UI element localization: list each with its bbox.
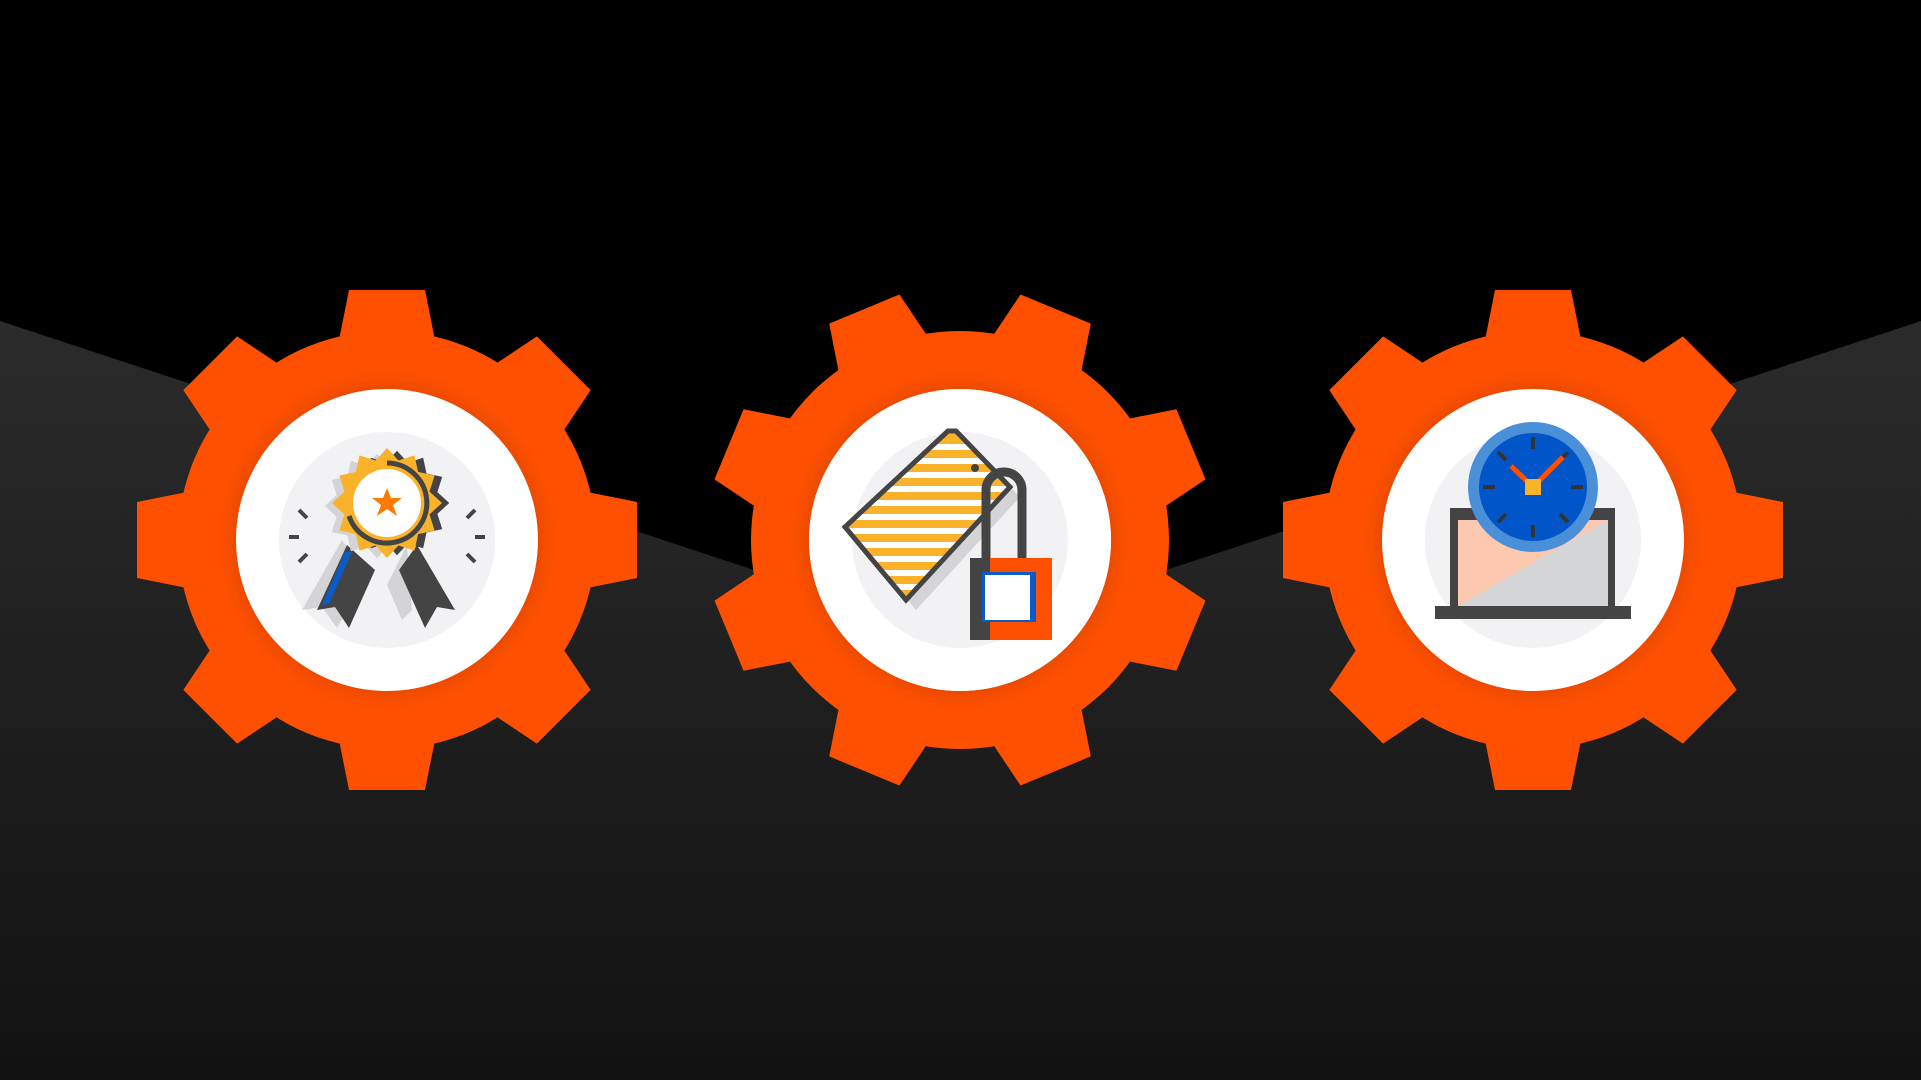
gear: laptop clock bbox=[1283, 290, 1783, 790]
icon: award ribbon bbox=[289, 448, 485, 628]
infographic canvas bbox=[0, 290, 1921, 1080]
gear: price tag lock bbox=[714, 294, 1206, 786]
icon: tag with padlock bbox=[840, 430, 1052, 640]
gear: award bbox=[137, 290, 637, 790]
icon: laptop with clock bbox=[1435, 422, 1631, 619]
